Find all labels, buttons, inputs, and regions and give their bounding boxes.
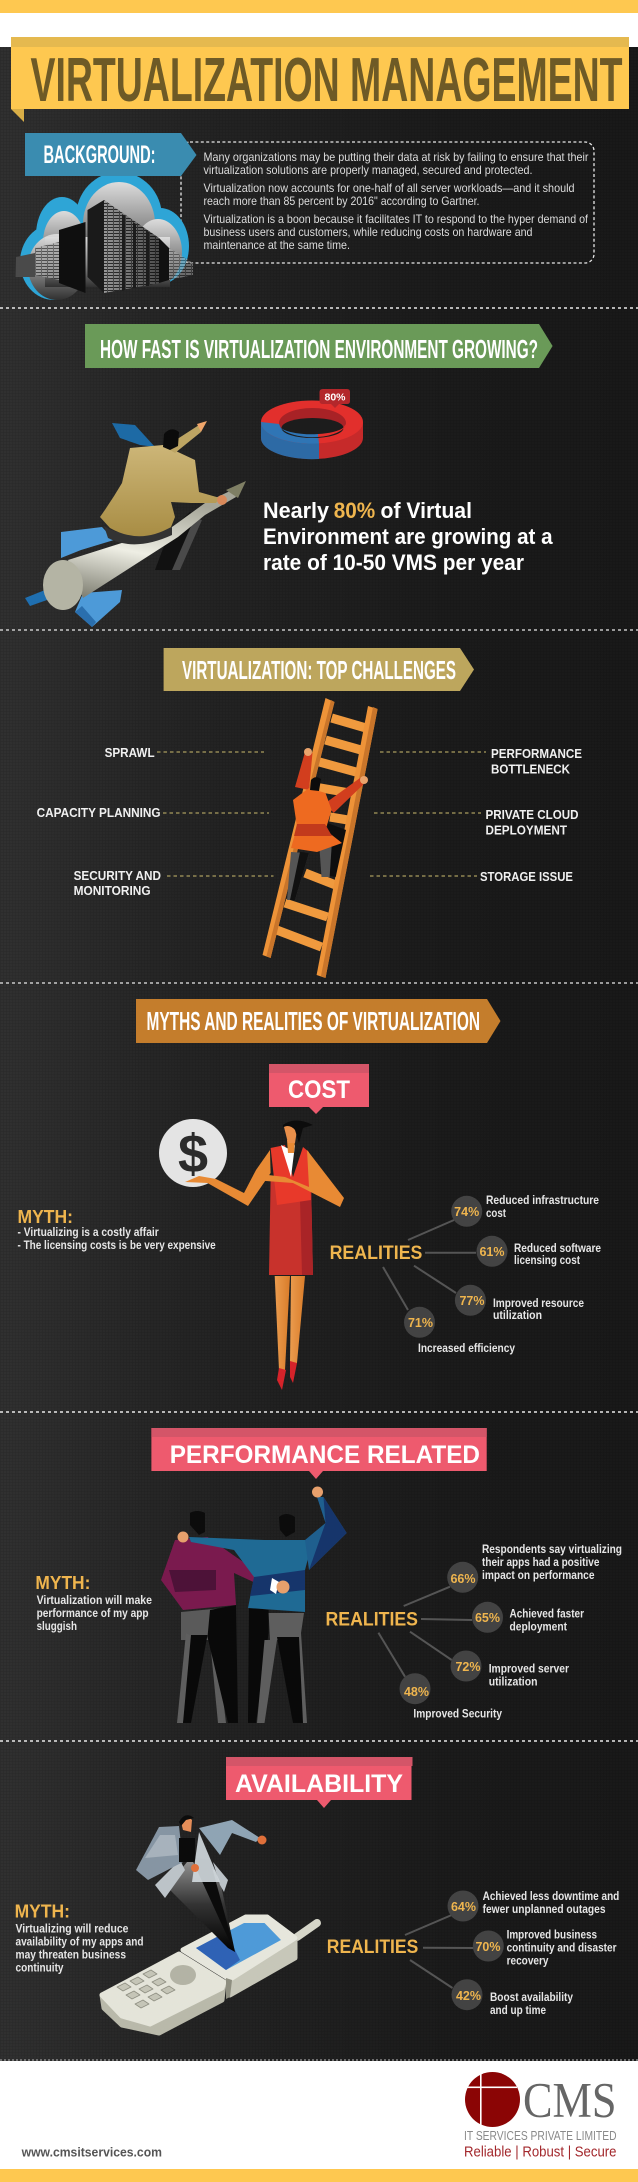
realities: cost: Increased efficiency (418, 1341, 515, 1355)
heading: availability: AVAILABILITY (235, 1770, 403, 1798)
realities: performance: 72% (455, 1660, 481, 1674)
myth: cost: - The licensing costs is be very expensive (18, 1238, 216, 1252)
icon: CMS logo: CMS (523, 2072, 616, 2128)
bottom yellow bar (0, 2169, 638, 2182)
challenge labels right: BOTTLENECK (491, 762, 571, 777)
realities: cost: 77% (459, 1294, 485, 1308)
background text block: reach more than 85 percent by 2016" according to Gartner. (204, 194, 480, 208)
heading: cost: COST (288, 1076, 350, 1104)
realities: availability: REALITIES (327, 1937, 418, 1958)
myth: performance: MYTH: (35, 1573, 90, 1593)
background text block: maintenance at the same time. (204, 238, 350, 252)
realities: cost: REALITIES (330, 1243, 422, 1264)
realities: performance: Improved server (489, 1662, 569, 1676)
realities: performance: Improved Security (413, 1707, 502, 1721)
realities: cost: 74% (454, 1205, 479, 1219)
realities: performance: deployment (510, 1620, 567, 1634)
realities: cost: Reduced infrastructure (486, 1193, 599, 1207)
challenge labels right: STORAGE ISSUE (480, 869, 573, 884)
icon: woman holding coin (185, 1120, 344, 1390)
growth statement: rate of 10-50 VMS per year (263, 550, 524, 575)
challenge labels left: SPRAWL (105, 745, 155, 760)
realities: availability (327, 1889, 619, 2017)
realities: cost: 71% (408, 1316, 433, 1330)
callout: background label arrow (25, 133, 196, 176)
growth statement: Environment are growing at a (263, 524, 553, 549)
heading: cost (269, 1064, 369, 1114)
background text block: Virtualization now accounts for one-half of all server workloads—and it should (204, 181, 574, 195)
title banner (11, 37, 629, 122)
challenge labels left: CAPACITY PLANNING (37, 805, 161, 820)
myth: performance: Virtualization will make (37, 1593, 152, 1607)
callout: 80% tag: 80% (324, 392, 346, 404)
callout: background label arrow: BACKGROUND: (44, 141, 156, 169)
heading: performance related (151, 1428, 487, 1479)
realities: availability: continuity and disaster (507, 1941, 617, 1955)
background text block: Many organizations may be putting their data at risk by failing to ensure that their (204, 150, 588, 164)
challenge labels right: PERFORMANCE (491, 746, 582, 761)
realities: cost: utilization (493, 1308, 542, 1322)
realities: performance: 48% (404, 1685, 429, 1699)
myth: availability: Virtualizing will reduce (16, 1922, 129, 1936)
realities: performance: 65% (475, 1611, 500, 1625)
realities: cost: cost (486, 1206, 506, 1220)
icon: man riding rocket (25, 421, 246, 627)
realities: availability: fewer unplanned outages (483, 1902, 606, 1916)
growth statement: Nearly (263, 498, 330, 523)
panel: growth (25, 324, 553, 627)
realities: availability: Boost availability (490, 1990, 573, 2004)
growth statement: of Virtual (380, 498, 472, 523)
realities: cost: licensing cost (514, 1253, 580, 1267)
realities: availability: 70% (475, 1940, 501, 1954)
realities: performance: Achieved faster (510, 1607, 584, 1621)
myth: cost: - Virtualizing is a costly affair (18, 1225, 159, 1239)
challenge labels left: SECURITY AND (74, 868, 161, 883)
panel: performance related (35, 1428, 622, 1723)
growth statement: 80% (334, 498, 375, 523)
panel: myths and realities, cost (18, 999, 601, 1390)
myth: availability: availability of my apps and (16, 1935, 144, 1949)
connector lines (157, 752, 486, 876)
myth: cost: MYTH: (18, 1207, 73, 1227)
background text block: business users and customers, while reducing costs on hardware and (204, 225, 532, 239)
icon: CMS logo (464, 2072, 616, 2161)
panel: availability (15, 1757, 619, 2033)
realities: cost: Improved resource (493, 1296, 584, 1310)
realities: performance: impact on performance (482, 1568, 595, 1582)
website url: www.cmsitservices.com (21, 2145, 162, 2160)
realities: cost: 61% (479, 1245, 505, 1259)
challenge labels left (37, 745, 161, 898)
icon: phone (102, 1917, 317, 2033)
heading arrow: myths and realities (136, 999, 500, 1043)
realities: cost (330, 1193, 601, 1355)
challenge labels right: PRIVATE CLOUD (486, 807, 578, 822)
realities: performance: REALITIES (326, 1610, 418, 1631)
myth: performance (35, 1573, 152, 1633)
realities: performance (326, 1542, 622, 1721)
heading: availability (226, 1757, 412, 1808)
myth: availability (15, 1902, 143, 1975)
chart: 3D donut 80% (261, 400, 363, 459)
myth: performance: sluggish (37, 1619, 77, 1633)
heading arrow: how fast (85, 324, 553, 368)
heading arrow: top challenges: VIRTUALIZATION: TOP CHALLENGES (182, 655, 456, 685)
icon: CMS logo: Reliable | Robust | Secure (464, 2144, 616, 2161)
panel: background (16, 133, 594, 300)
icon: cloud with server towers (16, 172, 193, 300)
challenge labels right: DEPLOYMENT (486, 823, 567, 838)
realities: availability: 42% (456, 1989, 481, 2003)
realities: availability: recovery (507, 1954, 549, 1968)
realities: performance: 66% (450, 1572, 476, 1586)
dashed text box (181, 142, 594, 263)
background text block: Virtualization is a boon because it facilitates IT to respond to the hyper demand of (204, 212, 589, 226)
icon: person climbing ladder (262, 698, 378, 978)
heading arrow: top challenges (164, 648, 474, 691)
background text block: virtualization solutions are properly managed, secured and protected. (204, 163, 532, 177)
icon: two men embracing (161, 1486, 347, 1723)
myth: availability: may threaten business (16, 1948, 126, 1962)
challenge labels right (480, 746, 582, 884)
heading: performance related: PERFORMANCE RELATED (170, 1441, 480, 1469)
icon: flying businessman (136, 1815, 266, 1952)
realities: availability: and up time (490, 2003, 546, 2017)
myth: performance: performance of my app (37, 1606, 149, 1620)
realities: performance: utilization (489, 1675, 538, 1689)
realities: availability: Improved business (507, 1928, 597, 1942)
icon: dollar coin (159, 1119, 227, 1187)
realities: cost: Reduced software (514, 1241, 601, 1255)
panel: top challenges (37, 648, 582, 978)
realities: availability: 64% (451, 1900, 476, 1914)
footer (21, 2072, 617, 2161)
top yellow bar (0, 0, 638, 13)
myth: availability: MYTH: (15, 1902, 70, 1922)
realities: performance: their apps had a positive (482, 1555, 600, 1569)
myth: cost (18, 1207, 216, 1252)
icon: dollar coin: $ (178, 1124, 208, 1184)
myth: availability: continuity (16, 1961, 64, 1975)
callout: 80% tag (320, 389, 350, 408)
challenge labels left: MONITORING (74, 883, 151, 898)
growth statement (263, 498, 553, 575)
background text block (204, 150, 589, 252)
